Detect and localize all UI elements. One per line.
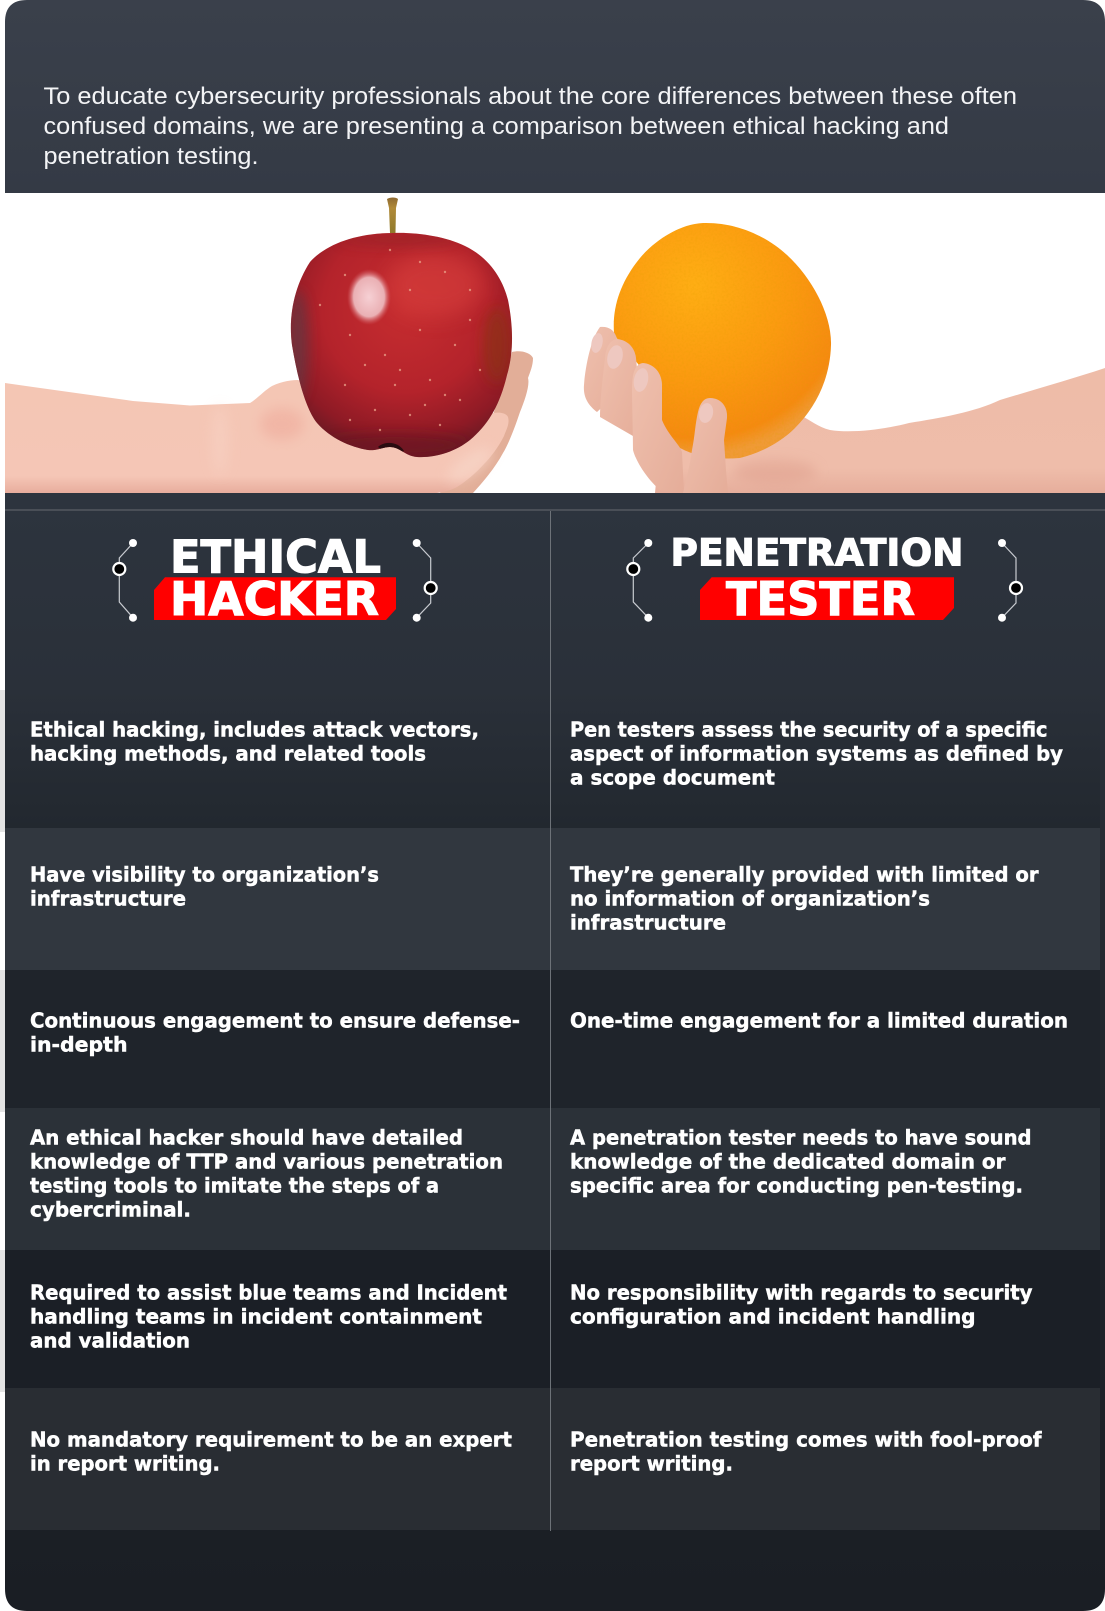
- row 2: ethical hacker text: infrastructure: [30, 887, 186, 911]
- row 5: penetration tester text: [570, 1280, 1032, 1328]
- row 1: penetration tester text: aspect of information systems as defined by: [570, 742, 1063, 766]
- row 4: penetration tester text: A penetration tester needs to have sound: [570, 1125, 1032, 1149]
- palm shading: [262, 408, 494, 484]
- heading: penetration tester: [627, 531, 1022, 626]
- row 1: penetration tester text: a scope document: [570, 766, 775, 790]
- row 4: penetration tester text: knowledge of the dedicated domain or: [570, 1149, 1006, 1173]
- apple: [288, 233, 512, 457]
- row 4: penetration tester text: specific area for conducting pen-testing.: [570, 1173, 1023, 1197]
- title word: ethical: ETHICAL: [170, 530, 381, 583]
- row 5: penetration tester text: configuration and incident handling: [570, 1304, 976, 1328]
- row 6: penetration tester text: [570, 1428, 1043, 1476]
- row 6: ethical hacker text: No mandatory requirement to be an expert: [30, 1428, 512, 1452]
- photo: hands holding an apple and an orange: [5, 193, 1105, 493]
- intro text block: confused domains, we are presenting a comparison between ethical hacking and: [44, 113, 949, 140]
- row 1: ethical hacker text: Ethical hacking, includes attack vectors,: [30, 718, 479, 742]
- row 2: ethical hacker text: [30, 863, 379, 911]
- row 6: penetration tester text: Penetration testing comes with fool-proof: [570, 1428, 1043, 1452]
- intro text block: To educate cybersecurity professionals about the core differences between these often: [44, 83, 1017, 110]
- title word: penetration: PENETRATION: [670, 531, 964, 574]
- row 5: ethical hacker text: Required to assist blue teams and Incident: [30, 1280, 507, 1304]
- left arm and palm: [5, 380, 509, 493]
- red label shape: [154, 577, 396, 620]
- apple stem: [387, 198, 398, 233]
- left edge pale bands: [0, 690, 5, 1392]
- row 4: ethical hacker text: cybercriminal.: [30, 1197, 191, 1221]
- title word: hacker: HACKER: [170, 572, 379, 626]
- row 3: penetration tester text: One-time engagement for a limited duration: [570, 1008, 1068, 1032]
- intro text block: penetration testing.: [44, 143, 258, 170]
- bracket: right: [413, 539, 437, 622]
- row 1: penetration tester text: [570, 718, 1063, 790]
- row 5: penetration tester text: No responsibility with regards to security: [570, 1280, 1032, 1304]
- row 3: ethical hacker text: in-depth: [30, 1032, 128, 1056]
- row 1: penetration tester text: Pen testers assess the security of a specific: [570, 718, 1048, 742]
- row 2: ethical hacker text: Have visibility to organization’s: [30, 863, 379, 887]
- red label shape: [700, 577, 954, 620]
- row 4: ethical hacker text: knowledge of TTP and various penetration: [30, 1149, 503, 1173]
- bracket: right: [998, 539, 1022, 622]
- fingernails: [590, 332, 715, 424]
- heading: ethical hacker: [113, 530, 437, 626]
- row 2: penetration tester text: infrastructure: [570, 911, 726, 935]
- intro text block: [44, 83, 1017, 170]
- rows and column backgrounds: [5, 690, 1100, 1530]
- row 6: ethical hacker text: in report writing.: [30, 1452, 220, 1476]
- left hand fingers behind apple: [440, 351, 533, 493]
- row 5: ethical hacker text: and validation: [30, 1328, 190, 1352]
- row 6: penetration tester text: report writing.: [570, 1452, 733, 1476]
- palm shading right: [738, 460, 812, 481]
- row 4: penetration tester text: [570, 1125, 1032, 1197]
- bracket: left: [627, 539, 652, 622]
- right hand palm and arm: [655, 368, 1105, 493]
- row 1: ethical hacker text: [30, 718, 479, 766]
- row 2: penetration tester text: no information of organization’s: [570, 887, 930, 911]
- title word: tester: TESTER: [726, 572, 915, 626]
- orange: [614, 223, 832, 458]
- row 2: penetration tester text: [570, 863, 1039, 935]
- row 6: ethical hacker text: [30, 1428, 512, 1476]
- row 3: ethical hacker text: Continuous engagement to ensure defense-: [30, 1008, 520, 1032]
- table header rule and centre divider: [5, 509, 1105, 1531]
- row 1: ethical hacker text: hacking methods, and related tools: [30, 742, 426, 766]
- row 2: penetration tester text: They’re generally provided with limited or: [570, 863, 1039, 887]
- row 3: ethical hacker text: [30, 1008, 520, 1056]
- row 4: ethical hacker text: An ethical hacker should have detailed: [30, 1125, 463, 1149]
- row 4: ethical hacker text: testing tools to imitate the steps of a: [30, 1173, 439, 1197]
- bracket: left: [113, 539, 137, 622]
- row 5: ethical hacker text: handling teams in incident containment: [30, 1304, 482, 1328]
- right hand fingers: [584, 327, 728, 493]
- row 4: ethical hacker text: [30, 1125, 503, 1221]
- row 5: ethical hacker text: [30, 1280, 507, 1352]
